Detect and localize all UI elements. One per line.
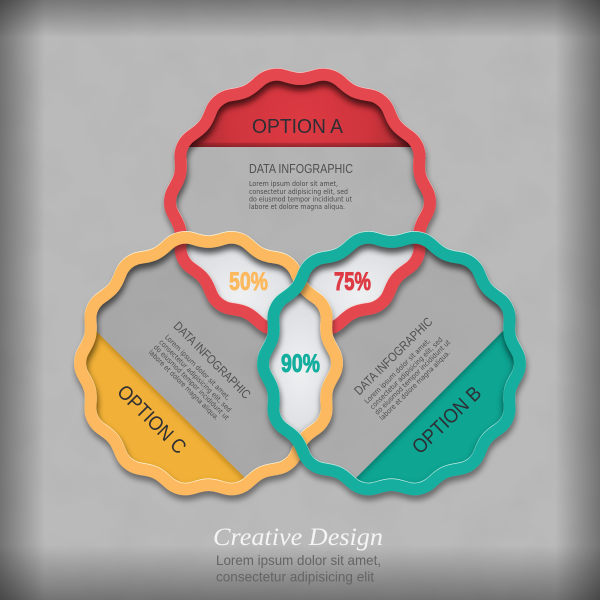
panel: option C interior [96,248,293,478]
number: 75%: 75% [334,268,371,296]
number: 90%: 90% [281,350,320,378]
text block: option A: labore et dolore magna aliqua. [249,203,345,211]
panel: option A interior [176,147,424,232]
number: 50%: 50% [229,268,268,296]
text block: option A: do eiusmod tempor incididunt ut [249,196,352,204]
overlap: red and teal [307,244,414,320]
footer text [216,552,381,584]
text block: option C: Lorem ipsum dolor sit amet, [163,333,232,402]
ring: option B teal [263,237,520,489]
ring: option A red [170,74,430,329]
band: option A red [189,80,411,147]
text block: option B [352,315,452,422]
overlap: red and yellow [186,244,293,320]
text block: option B: labore et dolore magna aliqua. [378,349,452,422]
ring: option C yellow [80,237,337,489]
title: Creative Design: Creative Design [213,524,383,551]
text block: option B: Lorem ipsum dolor sit amet, [363,337,432,405]
footer text: Lorem ipsum dolor sit amet, [216,552,381,568]
band: option C yellow [86,332,244,483]
text block: option C: labore et dolore magna aliqua. [147,348,220,422]
text block: option C: DATA INFOGRAPHIC [171,319,253,402]
text block: option C [147,319,253,422]
band: option B teal [356,330,514,483]
text block: option A: Lorem ipsum dolor sit amet, [249,180,338,188]
overlap: yellow and teal [269,294,331,434]
text block: option B: do eiusmod tempor incididunt ut [373,338,452,417]
label: option C: OPTION C [112,381,190,459]
footer text: consectetur adipisicing elit [216,568,374,584]
panel: option B interior [307,248,504,478]
text block: option B: consectetur adipisicing elit, sed [368,336,444,411]
label: option B: OPTION B [408,382,486,459]
text block: option A: DATA INFOGRAPHIC [249,162,353,176]
label: option A: OPTION A [252,116,344,138]
text block: option C: consectetur adipisicing elit, sed [157,338,233,414]
text block: option A [249,162,353,211]
text block: option A: consectetur adipisicing elit, sed [249,188,348,196]
text block: option B: DATA INFOGRAPHIC [352,315,435,398]
text block: option C: do eiusmod tempor incididunt ut [152,343,231,422]
